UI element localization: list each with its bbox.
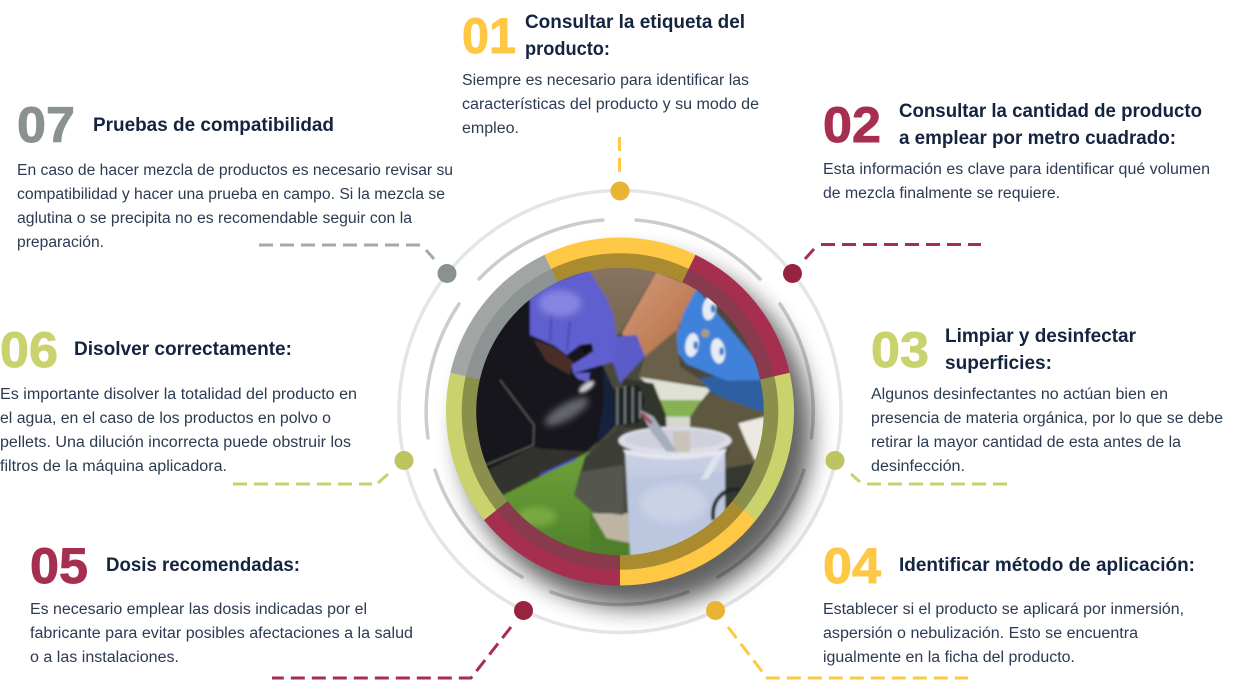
brown gap — [533, 340, 573, 375]
text 06: el agua, en el caso de los productos en polvo o — [0, 410, 331, 427]
heading 02: Consultar la cantidad de producto — [899, 101, 1202, 122]
text 06: filtros de la máquina aplicadora. — [0, 458, 227, 475]
boot — [576, 426, 623, 488]
dark knee — [617, 378, 666, 428]
heading 01: producto: — [525, 39, 610, 60]
jug — [476, 300, 605, 470]
text 01: Siempre es necesario para identificar las — [462, 72, 749, 89]
text 03: Algunos desinfectantes no actúan bien en — [871, 386, 1168, 403]
number 06: 06 — [0, 322, 58, 378]
step 01 — [462, 8, 759, 137]
text 06: pellets. Una dilución incorrecta puede obstruir los — [0, 434, 351, 451]
right leg — [690, 393, 767, 473]
arm — [622, 272, 698, 357]
number 01: 01 — [462, 8, 516, 64]
step 02 — [823, 97, 1210, 202]
band: inner dark segments — [469, 260, 771, 562]
band: outer bright segments — [454, 245, 786, 578]
connector 05 — [272, 601, 533, 678]
text 05: o a las instalaciones. — [30, 649, 179, 666]
text 01: empleo. — [462, 120, 519, 137]
white cup — [738, 417, 765, 461]
text 04: Establecer si el producto se aplicará por inmersión, — [823, 601, 1184, 618]
highlights — [538, 290, 582, 317]
text 06: Es importante disolver la totalidad del producto en — [0, 386, 357, 403]
text 03: presencia de materia orgánica, por lo que se debe — [871, 410, 1223, 427]
neck — [611, 385, 645, 425]
step 03 — [871, 322, 1223, 475]
connector 03 — [826, 451, 1007, 484]
heading 06: Disolver correctamente: — [74, 339, 292, 360]
text 05: fabricante para evitar posibles afectaciones a la salud — [30, 625, 413, 642]
text 04: igualmente en la ficha del producto. — [823, 649, 1075, 666]
text 01: características del producto y su modo de — [462, 96, 759, 113]
heading 01: Consultar la etiqueta del — [525, 12, 745, 33]
text 02: de mezcla finalmente se requiere. — [823, 185, 1060, 202]
water stream — [640, 410, 677, 452]
heading 05: Dosis recomendadas: — [106, 555, 300, 576]
step 06 — [0, 322, 357, 475]
drop shadow of central circle — [460, 256, 812, 608]
text 07: En caso de hacer mezcla de productos es necesario revisar su — [17, 162, 453, 179]
text 07: compatibilidad y hacer una prueba en campo. Si la mezcla se — [17, 186, 445, 203]
decorative outer ring — [399, 190, 841, 632]
stone — [592, 513, 632, 543]
blue part — [677, 288, 767, 381]
beaker rim — [618, 427, 732, 455]
number 02: 02 — [823, 97, 881, 153]
text 02: Esta información es clave para identificar qué volumen — [823, 161, 1210, 178]
heading 04: Identificar método de aplicación: — [899, 555, 1195, 576]
cuff — [613, 335, 645, 383]
connector 04 — [706, 601, 968, 678]
step 05 — [30, 538, 413, 666]
pale ground — [640, 377, 712, 407]
connector 06 — [233, 451, 414, 484]
connector 02 — [783, 244, 981, 283]
connector 07 — [259, 245, 456, 283]
number 07: 07 — [17, 97, 75, 153]
segmented inner ring — [426, 220, 813, 605]
connector 01 — [610, 137, 630, 200]
glove — [530, 270, 617, 373]
text 07: preparación. — [17, 234, 104, 251]
number 03: 03 — [871, 322, 929, 378]
text 03: retirar la mayor cantidad de esta antes de la — [871, 434, 1181, 451]
pants behind — [638, 330, 708, 385]
grass — [502, 450, 592, 552]
colored ring around photo — [454, 245, 786, 578]
lower blue — [699, 376, 764, 414]
text 05: Es necesario emplear las dosis indicadas por el — [30, 601, 367, 618]
heading 03: Limpiar y desinfectar — [945, 326, 1137, 347]
text 04: aspersión o nebulización. Esto se encuentra — [823, 625, 1138, 642]
shirt — [587, 268, 656, 336]
heading 03: superficies: — [945, 353, 1052, 374]
beaker body — [625, 450, 725, 563]
heading 02: a emplear por metro cuadrado: — [899, 128, 1176, 149]
step 07 — [17, 97, 453, 251]
text 07: aglutina o se precipita no es recomendable seguir con la — [17, 210, 412, 227]
ring handle — [713, 489, 739, 520]
number 04: 04 — [823, 538, 881, 594]
heading 07: Pruebas de compatibilidad — [93, 115, 334, 136]
number 05: 05 — [30, 538, 88, 594]
central photo: pouring product into a beaker — [470, 263, 770, 563]
text 03: desinfección. — [871, 458, 965, 475]
step 04 — [823, 538, 1195, 666]
